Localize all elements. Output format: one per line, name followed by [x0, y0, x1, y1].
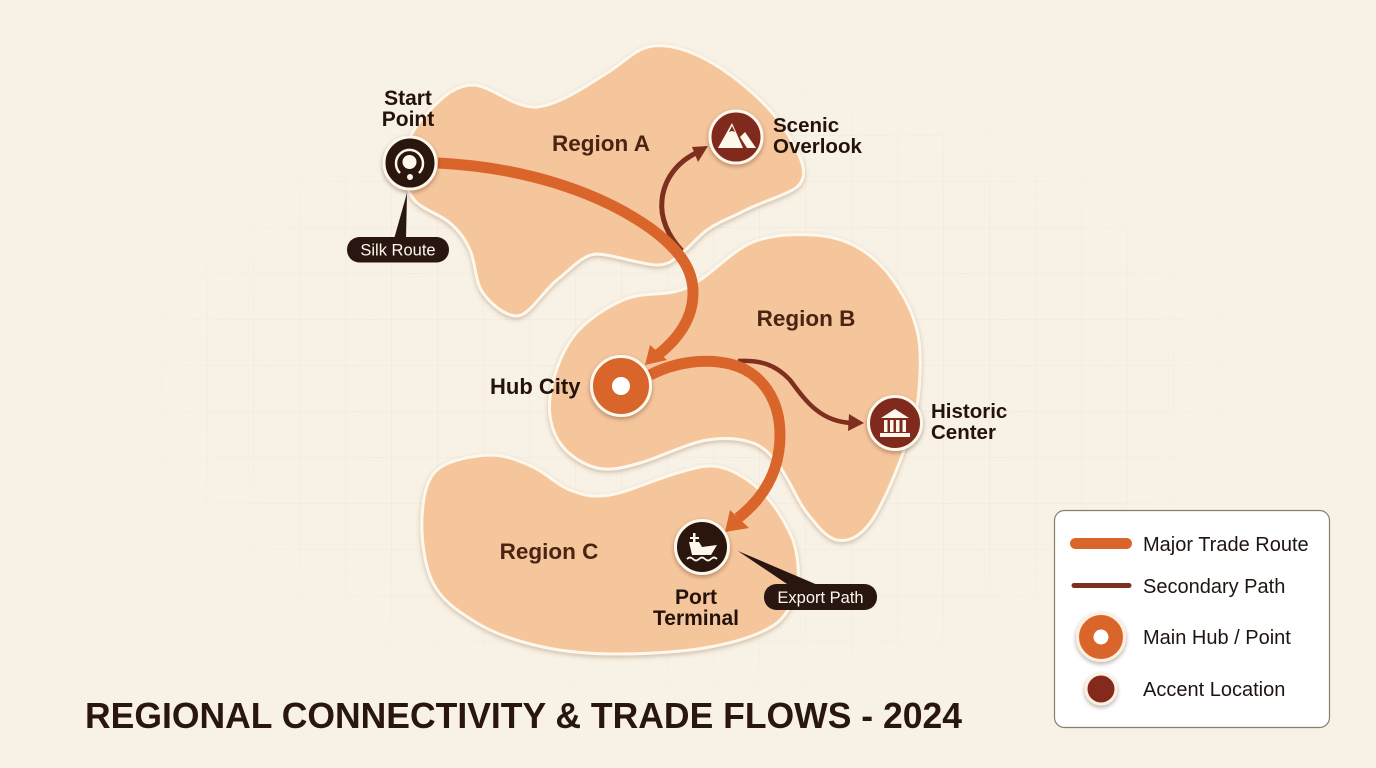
region shapes: [403, 46, 920, 654]
node: Port Terminal: [676, 520, 728, 574]
legend: major trade route: Major Trade Route: [1143, 534, 1309, 556]
callout: Silk Route: [347, 193, 449, 262]
icon: location ring: [396, 150, 423, 180]
callout: Silk Route: Silk Route: [360, 242, 436, 260]
region labels: Region C: [500, 539, 598, 564]
legend: accent location: [1086, 674, 1285, 704]
icon: mountains: [718, 123, 756, 148]
major trade route: Start to Hub: [438, 163, 693, 365]
legend: accent location: Accent Location: [1143, 679, 1285, 701]
region C shape: [422, 455, 798, 654]
region labels: Region A: [552, 131, 650, 156]
title: REGIONAL CONNECTIVITY & TRADE FLOWS - 2024: [85, 695, 963, 736]
background: [236, 140, 1140, 628]
legend: major trade route: [1070, 534, 1309, 556]
label: Historic Center: Historic: [931, 400, 1007, 423]
label: Scenic Overlook: Scenic: [773, 114, 839, 137]
region A shape: [403, 46, 804, 316]
major trade route: Hub to Port: [650, 361, 780, 532]
label: Historic Center: Center: [931, 421, 996, 444]
secondary path to Scenic Overlook: [662, 146, 708, 251]
legend: main hub / point: Main Hub / Point: [1143, 627, 1291, 649]
region B shape: [549, 235, 920, 540]
label: Start Point: Point: [382, 108, 434, 131]
region labels: Region B: [757, 306, 855, 331]
label: Port Terminal: Port: [675, 586, 717, 609]
legend: secondary path: Secondary Path: [1143, 576, 1285, 598]
icon: ship: [687, 533, 717, 560]
region labels: [500, 131, 855, 564]
legend: main hub / point: [1078, 614, 1291, 660]
icon: temple: [880, 409, 910, 437]
label: Scenic Overlook: Overlook: [773, 135, 862, 158]
node: Scenic Overlook: [710, 111, 762, 163]
node: Historic Center: [868, 396, 922, 450]
legend: secondary path: [1072, 576, 1285, 598]
label: Port Terminal: Terminal: [653, 607, 739, 630]
label: Start Point: Start: [384, 87, 432, 110]
node: Start Point: [384, 137, 436, 189]
callout: Export Path: Export Path: [777, 589, 864, 607]
label: Hub City: Hub City: [490, 374, 581, 399]
legend panel: [1054, 510, 1330, 728]
secondary path to Historic Center: [738, 361, 864, 431]
callout: Export Path: [738, 551, 877, 610]
node labels: [382, 87, 1007, 630]
node: Hub City: [592, 356, 650, 416]
